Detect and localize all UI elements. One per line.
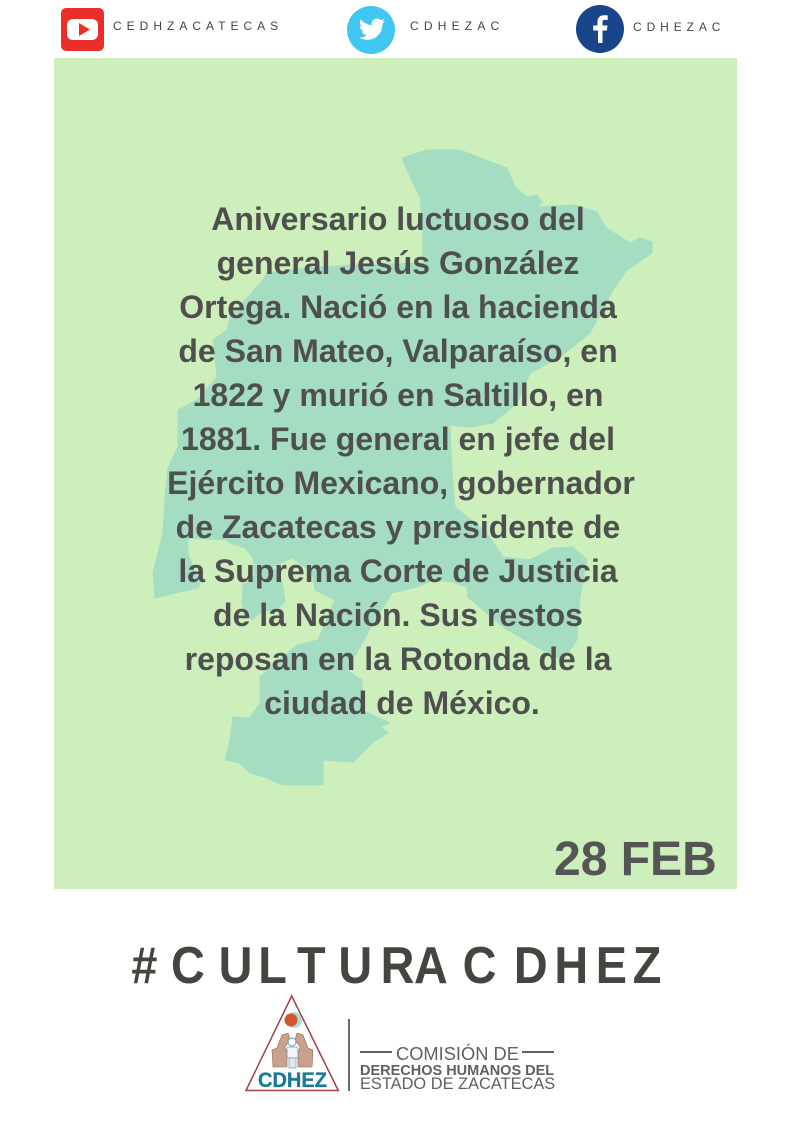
main text block: 1822 y murió en Saltillo, en [193, 377, 603, 413]
text: organisation name: COMISIÓN DE [396, 1043, 519, 1064]
handle: facebook: CDHEZAC [633, 20, 725, 34]
social header [61, 5, 725, 54]
main text block: de San Mateo, Valparaíso, en [178, 333, 618, 369]
hashtag heading: #CULTURACDHEZ [131, 937, 661, 995]
main text block: la Suprema Corte de Justicia [178, 553, 618, 589]
main text block: de Zacatecas y presidente de [176, 509, 620, 545]
main text block: 1881. Fue general en jefe del [181, 421, 615, 457]
main text block [167, 201, 635, 721]
handle: youtube: CEDHZACATECAS [113, 19, 283, 33]
text: organisation name [348, 1019, 555, 1093]
main text block: Ejército Mexicano, gobernador [167, 465, 635, 501]
main text block: ciudad de México. [264, 685, 540, 721]
icon: triangle emblem [244, 994, 340, 1092]
main text block: reposan en la Rotonda de la [185, 641, 611, 677]
handle: twitter: CDHEZAC [410, 19, 504, 33]
main text block: general Jesús González [217, 245, 579, 281]
text: organisation name: ESTADO DE ZACATECAS [360, 1075, 555, 1093]
logo: CDHEZ [244, 994, 555, 1093]
main text block: Ortega. Nació en la hacienda [179, 289, 617, 325]
panel: green background [54, 58, 737, 889]
text: organisation name: DERECHOS HUMANOS DEL [360, 1063, 554, 1079]
date: 28 FEB [554, 833, 717, 886]
icon: twitter [347, 6, 395, 54]
icon: youtube [61, 8, 104, 51]
icon: facebook [576, 5, 624, 53]
icon: triangle emblem: CDHEZ [258, 1069, 327, 1092]
main text block: Aniversario luctuoso del [211, 201, 585, 237]
main text block: de la Nación. Sus restos [213, 597, 583, 633]
